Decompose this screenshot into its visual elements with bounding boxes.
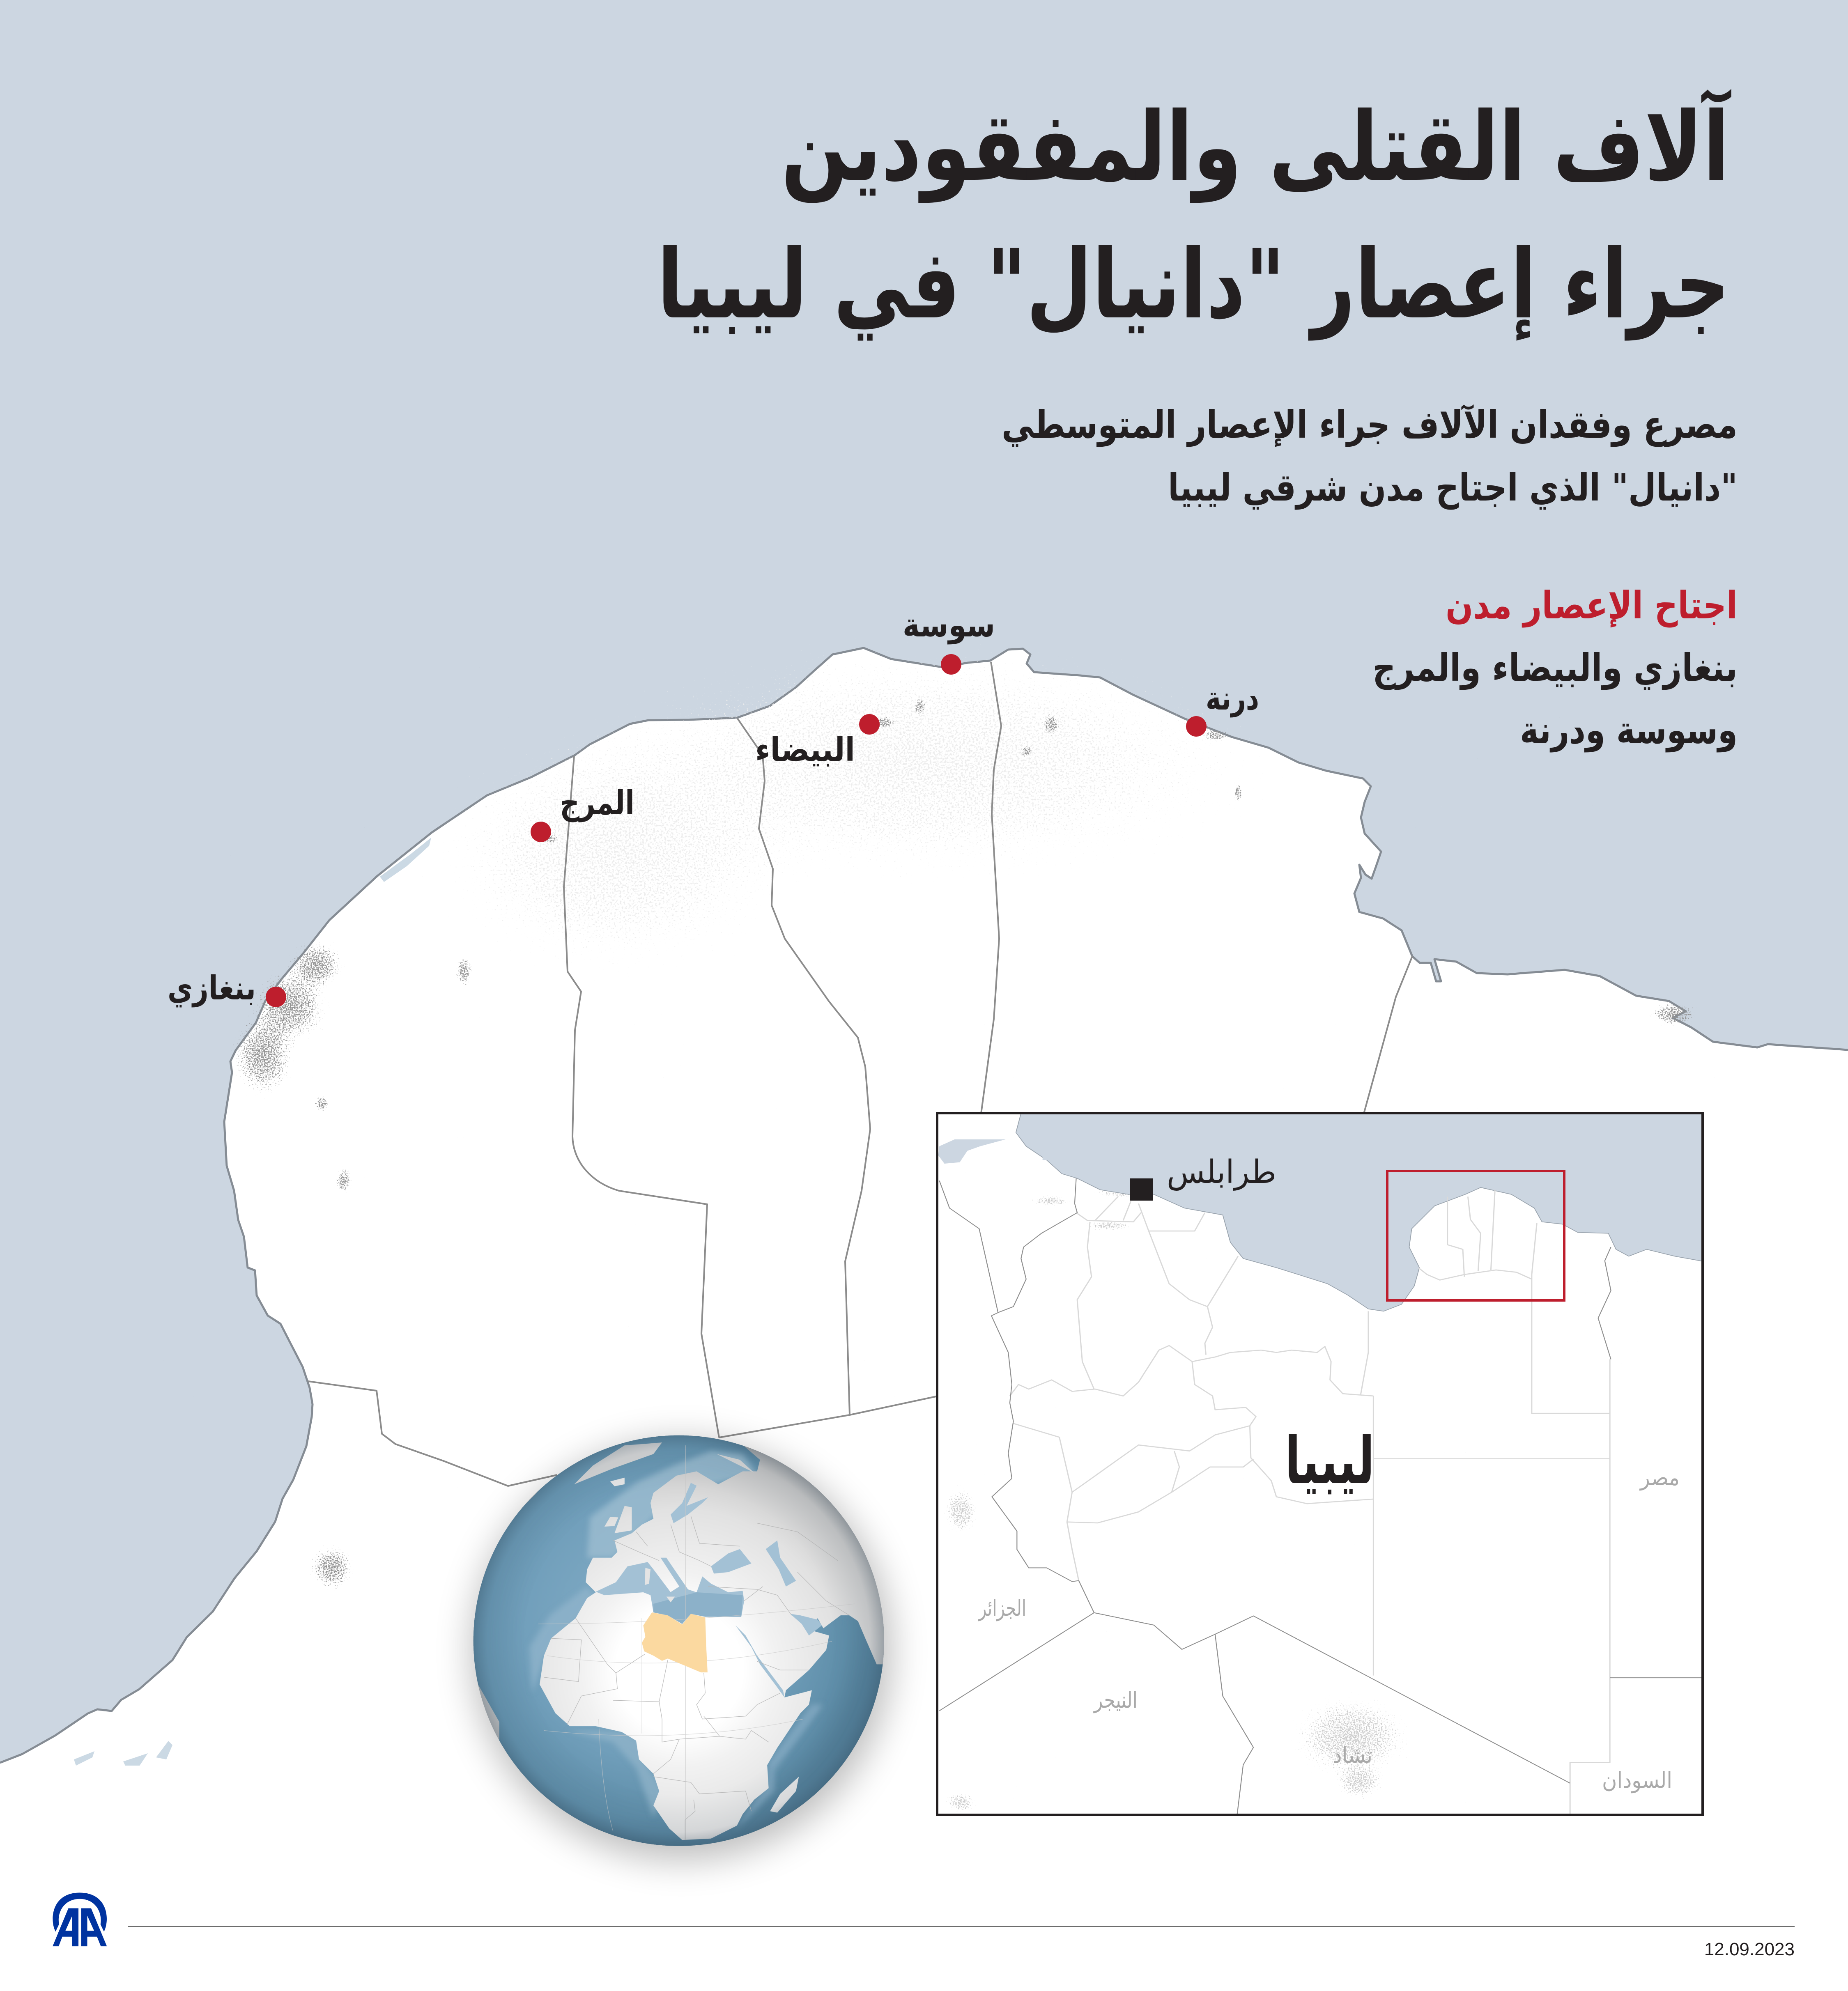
inset: Tripoli marker: طرابلس bbox=[1167, 1154, 1276, 1191]
main map: land of eastern Libya bbox=[0, 648, 1848, 1991]
main map: district boundaries bbox=[308, 662, 1412, 1486]
inset: sea bbox=[1016, 1113, 1705, 1311]
subtitle bbox=[1002, 403, 1738, 510]
city marker: Al Bayda bbox=[755, 714, 880, 769]
city marker: Benghazi: بنغازي bbox=[168, 969, 256, 1008]
inset: Libya label: ليبيا bbox=[1285, 1423, 1375, 1499]
date: 12.09.2023 bbox=[1704, 1939, 1795, 1959]
city marker: Susa bbox=[903, 606, 995, 675]
inset: neighbouring country labels: تشاد bbox=[1333, 1742, 1372, 1768]
text block: affected cities: بنغازي والبيضاء والمرج bbox=[1372, 646, 1738, 690]
inset: neighbouring country labels: الجزائر bbox=[978, 1595, 1026, 1621]
city marker: Derna: درنة bbox=[1206, 679, 1259, 718]
inset: neighbouring country labels: مصر bbox=[1639, 1465, 1680, 1490]
inset: country borders bbox=[939, 1178, 1704, 1815]
main map: urban areas bbox=[226, 695, 1702, 1594]
city marker: Derna bbox=[1186, 679, 1259, 737]
globe bbox=[472, 1435, 891, 1860]
title bbox=[657, 89, 1732, 341]
city marker: Al Marj bbox=[531, 784, 634, 842]
footer line bbox=[128, 1926, 1795, 1927]
inset map frame and content bbox=[937, 1113, 1705, 1815]
inset: locator rectangle bbox=[1387, 1171, 1564, 1300]
main map: coastal lagoons bbox=[74, 838, 431, 1766]
inset: neighbouring country labels: السودان bbox=[1602, 1767, 1672, 1793]
main map: faint terrain texture bbox=[411, 628, 1314, 990]
text block: affected cities: اجتاح الإعصار مدن bbox=[1446, 583, 1738, 628]
city marker: Susa: سوسة bbox=[903, 606, 995, 645]
inset: Tripoli marker bbox=[1130, 1154, 1276, 1201]
text block: affected cities bbox=[1372, 583, 1738, 753]
inset: lakes bbox=[938, 1139, 1054, 1164]
city marker: Al Bayda: البيضاء bbox=[755, 730, 855, 769]
subtitle: ‏"دانيال" الذي اجتاح مدن شرقي ليبيا‏ bbox=[1168, 466, 1738, 510]
inset: neighbouring country labels: النيجر bbox=[1093, 1687, 1138, 1713]
city marker: Al Marj: المرج bbox=[560, 784, 634, 822]
inset: internal borders bbox=[1010, 1190, 1610, 1815]
logo: Anadolu Agency bbox=[53, 1892, 107, 1946]
subtitle: مصرع وفقدان الآلاف جراء الإعصار المتوسطي bbox=[1002, 403, 1738, 447]
Libya highlighted on globe bbox=[642, 1612, 708, 1672]
inset: neighbouring country labels bbox=[978, 1465, 1680, 1793]
text block: affected cities: وسوسة ودرنة bbox=[1520, 708, 1738, 753]
